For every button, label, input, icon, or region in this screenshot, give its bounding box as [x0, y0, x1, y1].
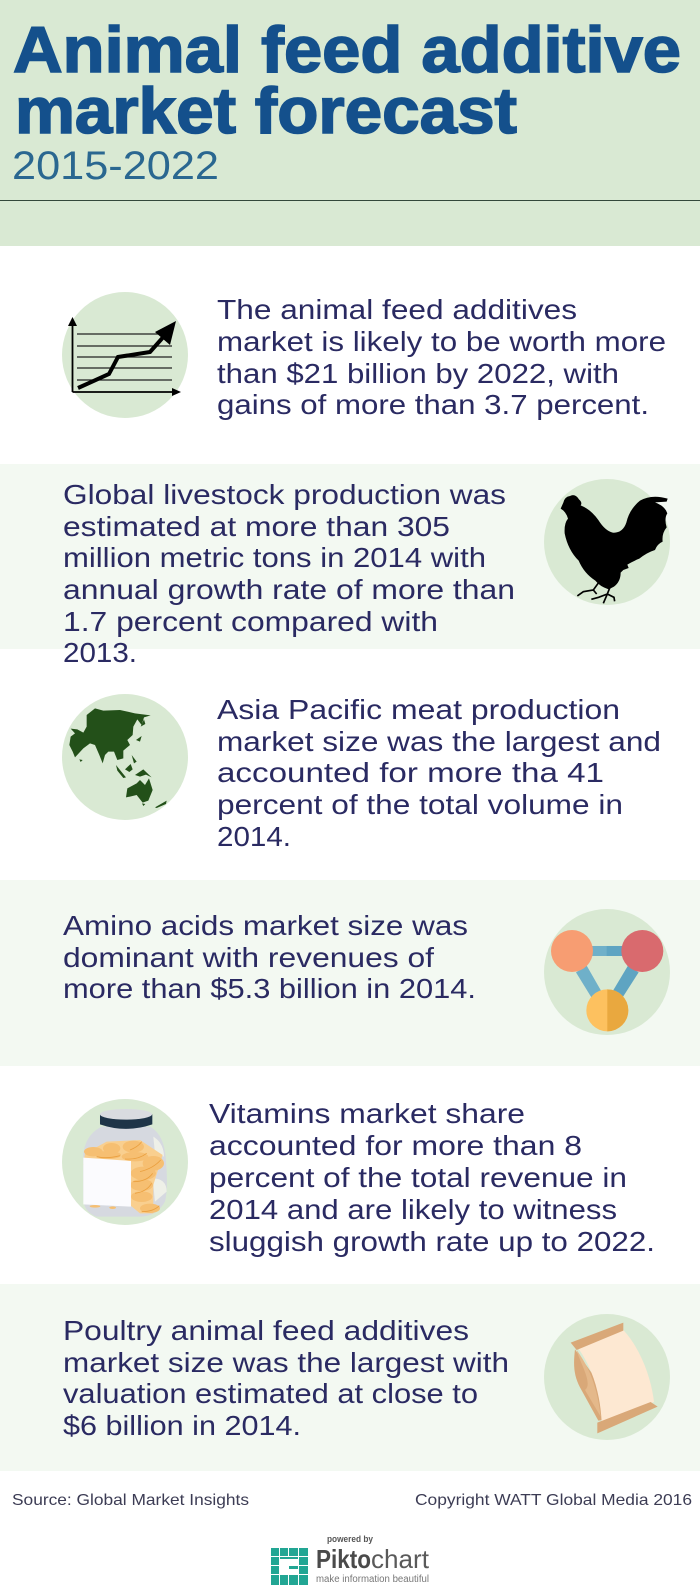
- text: poultry: [63, 1315, 509, 1441]
- footer credits: Copyright WATT Global Media 2016: [415, 1492, 692, 1509]
- header panel: [0, 0, 700, 246]
- Piktochart logo: chart: [371, 1544, 430, 1574]
- text: livestock production: million metric tons in 2014 with: [63, 542, 486, 573]
- text: Asia Pacific: accounted for more tha 41: [217, 757, 604, 788]
- title: [13, 13, 681, 147]
- text: livestock production: 2013.: [63, 637, 137, 668]
- text: poultry: valuation estimated at close to: [63, 1378, 478, 1409]
- text: Asia Pacific: Asia Pacific meat production: [217, 694, 620, 725]
- icon: Asia Pacific map: [62, 694, 188, 820]
- footer credits: [12, 1492, 692, 1509]
- text: Asia Pacific: market size was the largest and: [217, 726, 661, 757]
- panel: amino acids: [0, 880, 700, 1066]
- text: vitamins: accounted for more than 8: [209, 1130, 582, 1161]
- panel: vitamins: [62, 1098, 655, 1257]
- text: amino acids: dominant with revenues of: [63, 942, 434, 973]
- Piktochart logo: powered by: [327, 1534, 373, 1544]
- footer credits: Source: Global Market Insights: [12, 1492, 249, 1509]
- text: vitamins: [209, 1098, 655, 1257]
- title: market forecast: [15, 74, 517, 147]
- text: livestock production: Global livestock production was: [63, 479, 506, 510]
- icon: molecule: [544, 909, 670, 1035]
- text: market worth: market is likely to be worth more: [217, 326, 666, 357]
- text: Asia Pacific: 2014.: [217, 821, 291, 852]
- text: poultry: $6 billion in 2014.: [63, 1410, 301, 1441]
- icon: rooster: [544, 479, 670, 605]
- icon: Piktochart mark: [271, 1548, 308, 1585]
- text: poultry: market size was the largest with: [63, 1347, 509, 1378]
- text: livestock production: estimated at more than 305: [63, 511, 450, 542]
- text: amino acids: [63, 910, 476, 1004]
- text: vitamins: sluggish growth rate up to 2022.: [209, 1226, 655, 1257]
- text: livestock production: annual growth rate of more than: [63, 574, 515, 605]
- panel: livestock production: [0, 464, 700, 668]
- Piktochart logo: make information beautiful: [316, 1574, 429, 1585]
- title: Animal feed additive: [13, 13, 681, 86]
- icon: line chart: [62, 292, 188, 418]
- text: vitamins: percent of the total revenue in: [209, 1162, 627, 1193]
- text: livestock production: 1.7 percent compared with: [63, 606, 438, 637]
- Piktochart logo: Pikto: [316, 1544, 371, 1574]
- text: amino acids: Amino acids market size was: [63, 910, 468, 941]
- text: market worth: The animal feed additives: [217, 294, 577, 325]
- panel: Asia Pacific: [62, 694, 661, 852]
- icon: vitamin jar: [62, 1099, 188, 1225]
- text: amino acids: more than $5.3 billion in 2014.: [63, 973, 476, 1004]
- text: Asia Pacific: [217, 694, 661, 852]
- text: market worth: [217, 294, 666, 420]
- text: market worth: than $21 billion by 2022, with: [217, 358, 619, 389]
- icon: feed bag: [544, 1314, 670, 1440]
- text: poultry: Poultry animal feed additives: [63, 1315, 469, 1346]
- subtitle: years: 2015-2022: [12, 144, 219, 188]
- text: Asia Pacific: percent of the total volume in: [217, 789, 623, 820]
- panel: poultry: [0, 1284, 700, 1471]
- text: livestock production: [63, 479, 515, 668]
- text: vitamins: Vitamins market share: [209, 1098, 525, 1129]
- text: vitamins: 2014 and are likely to witness: [209, 1194, 617, 1225]
- Piktochart logo: [271, 1534, 430, 1585]
- text: market worth: gains of more than 3.7 percent.: [217, 389, 649, 420]
- panel: market worth: [62, 292, 666, 420]
